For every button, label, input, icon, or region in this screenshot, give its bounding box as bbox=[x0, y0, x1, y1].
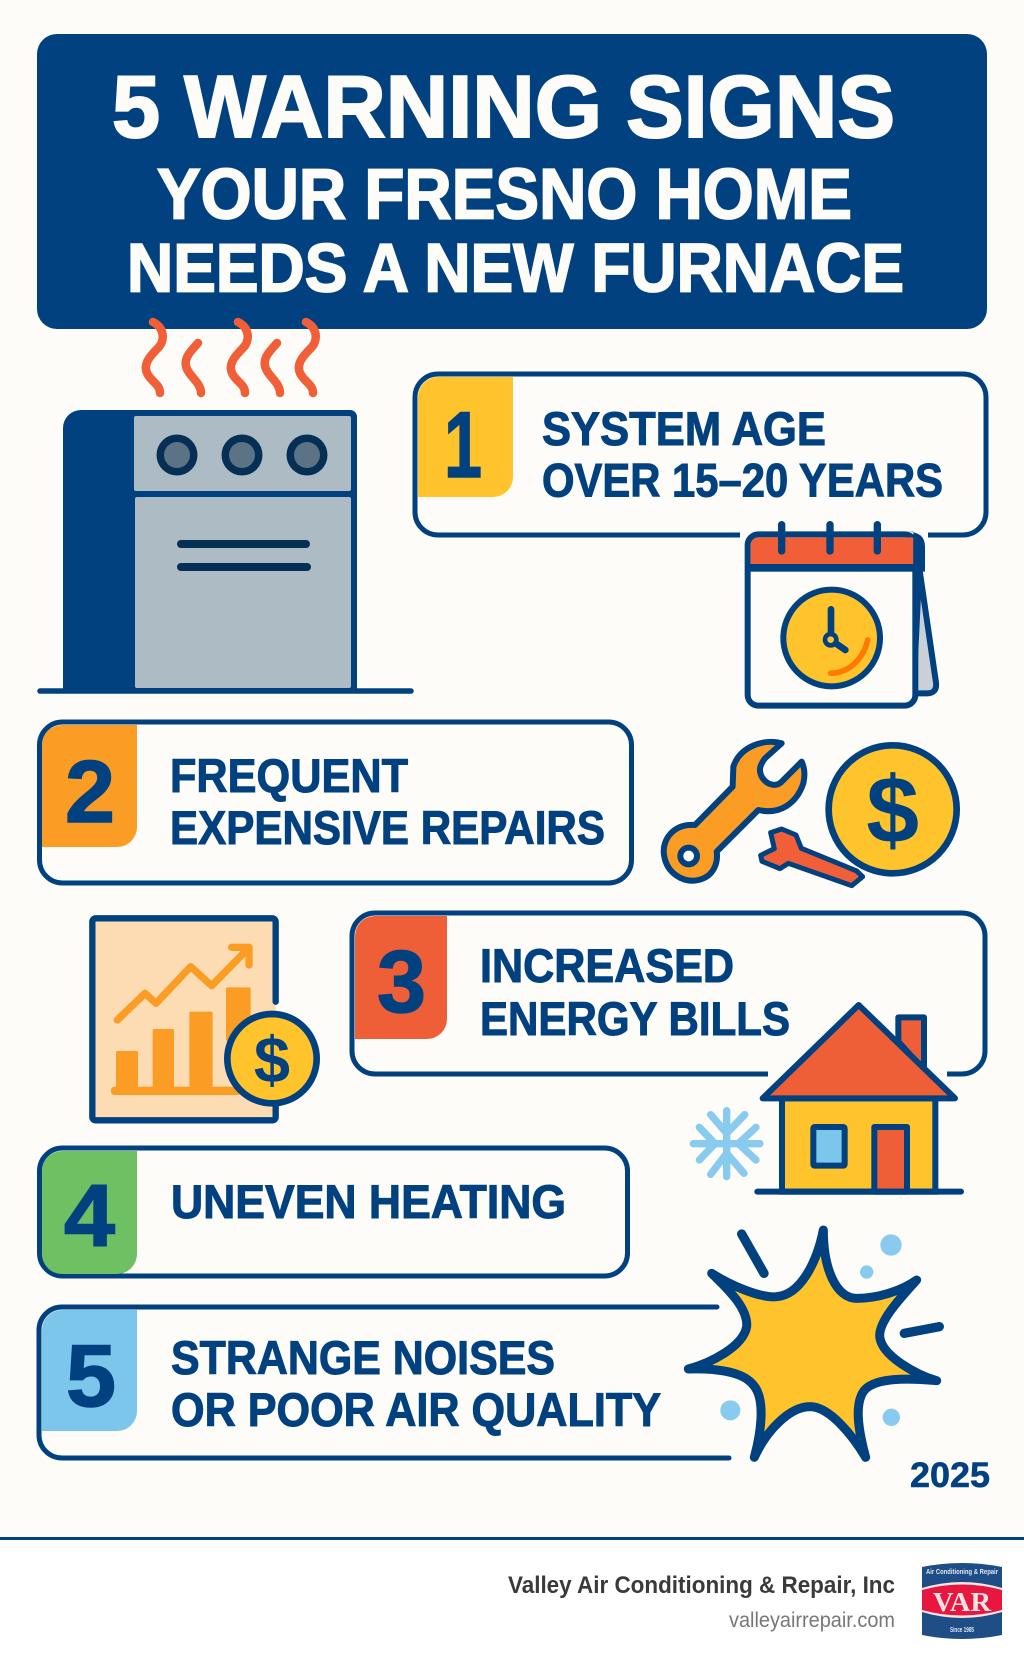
logo bbox=[922, 1563, 1002, 1639]
panel: sign 2 frequent expensive repairs: 2 bbox=[65, 742, 115, 841]
panel: sign 3 increased energy bills: 3 bbox=[377, 932, 426, 1031]
title banner bbox=[37, 34, 987, 329]
panel: sign 5 strange noises or poor air quality bbox=[39, 1307, 729, 1458]
icon: rising bill chart with coin bbox=[92, 918, 317, 1120]
panel: sign 2 frequent expensive repairs: EXPENSIVE REPAIRS bbox=[170, 802, 605, 855]
title banner: NEEDS A NEW FURNACE bbox=[127, 230, 904, 306]
icon: house with snowflake bbox=[693, 1005, 961, 1192]
footer bbox=[0, 1537, 1024, 1666]
panel: sign 5 strange noises or poor air quality: OR POOR AIR QUALITY bbox=[171, 1384, 661, 1437]
logo: Air Conditioning & Repair bbox=[926, 1569, 998, 1576]
icon: wrench and dollar coin bbox=[664, 742, 957, 886]
website: valleyairrepair.com bbox=[729, 1609, 895, 1632]
icon: calendar with clock bbox=[748, 525, 936, 706]
panel: sign 5 strange noises or poor air quality: 5 bbox=[66, 1326, 116, 1425]
floor line bbox=[40, 688, 411, 694]
title banner: YOUR FRESNO HOME bbox=[157, 156, 852, 234]
panel: sign 3 increased energy bills bbox=[352, 913, 985, 1074]
icon: noise burst bbox=[688, 1230, 939, 1457]
panel: sign 1 system age: OVER 15–20 YEARS bbox=[542, 454, 943, 508]
heat waves bbox=[146, 322, 316, 393]
panel: sign 2 frequent expensive repairs: FREQUENT bbox=[170, 750, 408, 803]
icon: wrench and dollar coin: $ bbox=[866, 758, 919, 864]
icon: furnace with heat waves bbox=[40, 322, 411, 693]
panel: sign 4 uneven heating: 4 bbox=[64, 1166, 115, 1265]
title banner: 5 WARNING SIGNS bbox=[112, 57, 895, 156]
logo: VAR bbox=[933, 1587, 992, 1617]
company name: Valley Air Conditioning & Repair, Inc bbox=[508, 1572, 895, 1599]
furnace body bbox=[63, 410, 357, 693]
panel: sign 1 system age: 1 bbox=[444, 392, 482, 497]
logo: Since 1985 bbox=[950, 1627, 974, 1634]
panel: sign 1 system age: SYSTEM AGE bbox=[542, 403, 826, 456]
year label: 2025 bbox=[910, 1456, 990, 1495]
panel: sign 3 increased energy bills: ENERGY BILLS bbox=[480, 993, 790, 1046]
icon: rising bill chart with coin: $ bbox=[254, 1023, 290, 1096]
panel: sign 1 system age bbox=[415, 374, 986, 535]
panel: sign 4 uneven heating: UNEVEN HEATING bbox=[171, 1176, 566, 1229]
panel: sign 2 frequent expensive repairs bbox=[40, 722, 632, 883]
snowflake bbox=[693, 1111, 760, 1177]
panel: sign 5 strange noises or poor air quality: STRANGE NOISES bbox=[171, 1332, 555, 1385]
panel: sign 4 uneven heating bbox=[40, 1148, 628, 1276]
panel: sign 3 increased energy bills: INCREASED bbox=[480, 940, 734, 993]
